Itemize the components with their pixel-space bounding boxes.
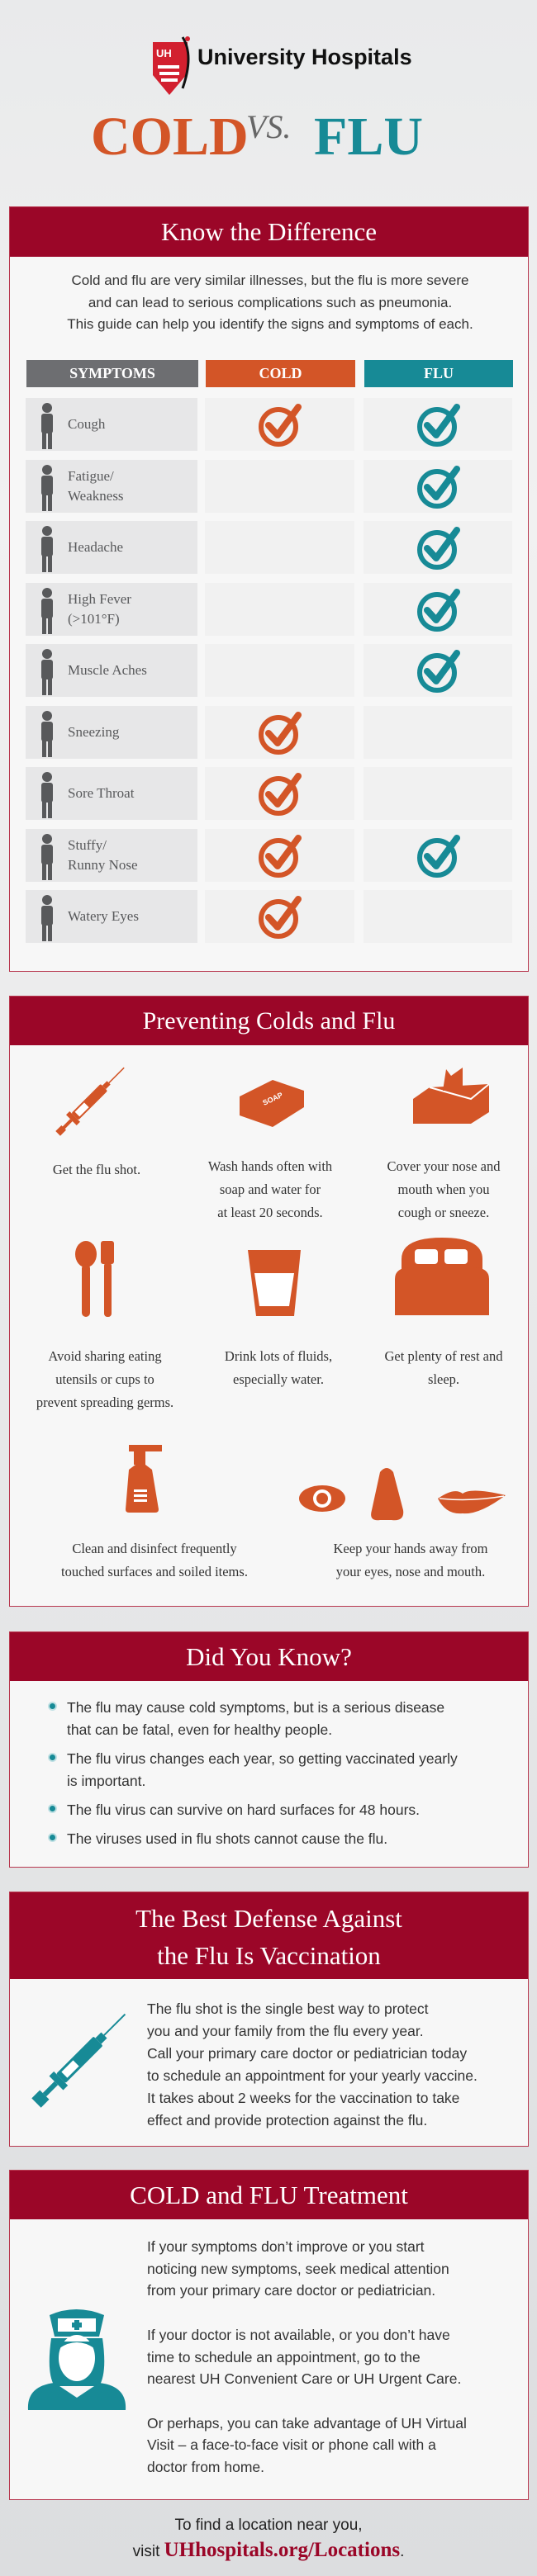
body text: Visit – a face-to-face visit or phone call with a <box>147 2436 436 2453</box>
icon: eye nose mouth <box>299 1468 506 1521</box>
text: utensils: prevent spreading germs. <box>36 1395 173 1410</box>
body text: Or perhaps, you can take advantage of UH Virtual <box>147 2415 467 2432</box>
row: sore throat <box>26 767 302 820</box>
row: stuffy nose: Runny Nose <box>68 857 138 872</box>
table header <box>26 360 513 387</box>
heading: The Best Defense Against <box>135 1904 402 1933</box>
heading: Preventing Colds and Flu <box>143 1007 395 1035</box>
row: watery eyes <box>26 890 302 943</box>
row: muscle aches <box>26 644 460 697</box>
text: utensils <box>36 1348 173 1410</box>
icon: tissue box <box>413 1068 489 1124</box>
text: disinfect: touched surfaces and soiled items. <box>61 1564 248 1579</box>
text: hands away <box>334 1541 487 1579</box>
row: sneezing <box>26 706 302 759</box>
row: headache <box>26 521 460 574</box>
bullet list: is important. <box>67 1772 145 1788</box>
icon: soap <box>240 1080 304 1127</box>
title: FLU <box>314 107 423 167</box>
intro text <box>67 272 473 332</box>
text: disinfect: Clean and disinfect frequently <box>72 1541 237 1556</box>
text: wash hands <box>208 1158 332 1220</box>
text: rest: sleep. <box>428 1371 459 1387</box>
body text: If your doctor is not available, or you don’t have <box>147 2327 450 2343</box>
footer <box>132 2517 404 2561</box>
text: cover nose: Cover your nose and <box>387 1158 501 1174</box>
heading <box>10 997 528 1045</box>
panel: did you know <box>9 1631 529 1868</box>
row: sneezing: Sneezing <box>68 723 119 740</box>
icon: soap: SOAP <box>261 1091 284 1107</box>
text: wash hands: soap and water for <box>220 1181 321 1197</box>
table rows <box>26 398 460 943</box>
row: muscle aches: Muscle Aches <box>68 662 147 678</box>
body text: doctor from home. <box>147 2459 264 2475</box>
text: fluids: Drink lots of fluids, <box>225 1348 332 1364</box>
title: COLD <box>91 107 249 167</box>
row: cough: Cough <box>68 416 105 432</box>
table header: SYMPTOMS <box>69 365 155 381</box>
body text: It takes about 2 weeks for the vaccination to take <box>147 2090 459 2106</box>
table header: FLU <box>424 365 454 381</box>
heading: COLD and FLU Treatment <box>130 2181 408 2209</box>
text: utensils: Avoid sharing eating <box>48 1348 162 1364</box>
heading: Did You Know? <box>186 1642 352 1671</box>
text: hands away: Keep your hands away from <box>334 1541 487 1556</box>
row: headache: Headache <box>68 539 123 555</box>
title: VS. <box>246 108 291 145</box>
intro text: This guide can help you identify the signs and symptoms of each. <box>67 316 473 332</box>
bullet list: The flu virus can survive on hard surfaces for 48 hours. <box>67 1802 420 1818</box>
text: rest: Get plenty of rest and <box>385 1348 502 1364</box>
text: cover nose: mouth when you <box>398 1181 489 1197</box>
icon: bed <box>395 1238 489 1315</box>
row: watery eyes: Watery Eyes <box>68 908 139 924</box>
icon: glass <box>248 1250 301 1316</box>
text: wash hands: at least 20 seconds. <box>217 1205 323 1220</box>
table header: COLD <box>259 365 302 381</box>
intro text: and can lead to serious complications such as pneumonia. <box>88 294 452 310</box>
intro text: Cold and flu are very similar illnesses, but the flu is more severe <box>72 272 468 288</box>
text: disinfect <box>61 1541 248 1579</box>
text: cover nose: cough or sneeze. <box>398 1205 489 1220</box>
panel: treatment <box>9 2170 529 2500</box>
heading <box>10 1632 528 1681</box>
body text: you and your family from the flu every year. <box>147 2023 424 2039</box>
heading <box>10 2171 528 2219</box>
row: fever: (>101°F) <box>68 611 120 626</box>
logo <box>153 36 412 95</box>
body text: noticing new symptoms, seek medical attention <box>147 2261 449 2277</box>
row: stuffy nose: Stuffy/ <box>68 837 107 852</box>
logo: University Hospitals <box>197 45 412 69</box>
text: rest <box>385 1348 502 1387</box>
body text: Call your primary care doctor or pediatrician today <box>147 2045 467 2062</box>
logo: UH <box>156 47 172 59</box>
footer: visit UHhospitals.org/Locations. <box>133 2539 404 2561</box>
icon: nurse <box>28 2309 126 2410</box>
panel: vaccination <box>9 1892 529 2147</box>
bullet list: The viruses used in flu shots cannot cause the flu. <box>67 1830 387 1847</box>
body text: nearest UH Convenient Care or UH Urgent Care. <box>147 2370 461 2387</box>
text: fluids <box>225 1348 332 1387</box>
title <box>91 107 423 167</box>
row: fever <box>26 583 460 636</box>
row: fatigue: Weakness <box>68 487 124 504</box>
body text: effect and provide protection against the flu. <box>147 2112 427 2129</box>
icon: syringe <box>55 1067 125 1136</box>
heading: the Flu Is Vaccination <box>157 1941 381 1970</box>
row: cough <box>26 398 460 451</box>
body text <box>147 2001 478 2129</box>
text: utensils: utensils or cups to <box>55 1371 154 1387</box>
row: sore throat: Sore Throat <box>68 785 134 801</box>
icon: utensils <box>75 1241 114 1317</box>
bullet list: The flu may cause cold symptoms, but is a serious disease <box>67 1699 444 1716</box>
bullet list: The flu virus changes each year, so getting vaccinated yearly <box>67 1750 458 1767</box>
footer: To find a location near you, <box>174 2517 363 2534</box>
text: flu shot: Get the flu shot. <box>53 1162 140 1177</box>
panel: preventing <box>9 996 529 1607</box>
heading <box>10 1892 528 1979</box>
row: fever: High Fever <box>68 591 131 606</box>
bullet list <box>48 1699 458 1847</box>
body text <box>147 2238 467 2475</box>
bullet list: that can be fatal, even for healthy people. <box>67 1721 332 1737</box>
icon: spray bottle <box>126 1445 162 1513</box>
text: hands away: your eyes, nose and mouth. <box>336 1564 485 1579</box>
text: fluids: especially water. <box>233 1371 324 1387</box>
row: stuffy nose <box>26 829 460 882</box>
body text: time to schedule an appointment, go to the <box>147 2349 421 2365</box>
text: cover nose <box>387 1158 501 1220</box>
icon: syringe teal <box>31 2013 126 2108</box>
body text: The flu shot is the single best way to protect <box>147 2001 428 2017</box>
panel: know the difference <box>9 206 529 972</box>
body text: to schedule an appointment for your yearly vaccine. <box>147 2067 478 2084</box>
heading: Know the Difference <box>161 217 377 246</box>
heading <box>10 207 528 257</box>
body text: from your primary care doctor or pediatrician. <box>147 2282 435 2299</box>
body text: If your symptoms don’t improve or you start <box>147 2238 425 2255</box>
row: fatigue: Fatigue/ <box>68 467 114 484</box>
text: wash hands: Wash hands often with <box>208 1158 332 1174</box>
row: fatigue <box>26 460 460 513</box>
